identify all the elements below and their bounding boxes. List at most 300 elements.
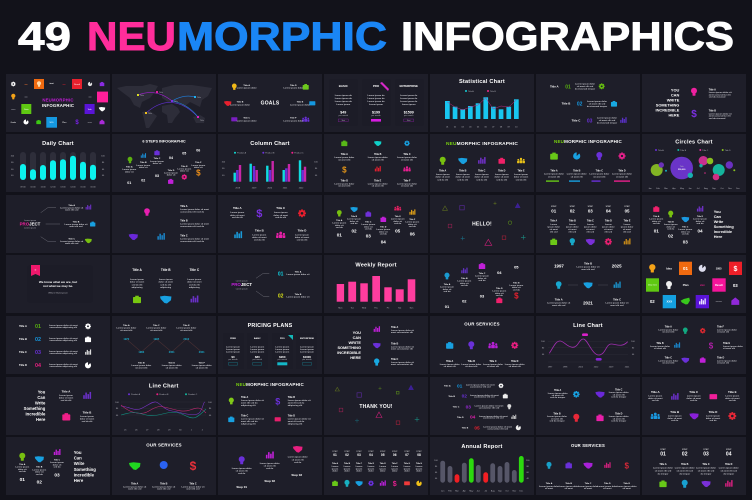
plan: pro: PRO <box>373 84 380 88</box>
step columns: Lorem <box>356 466 362 468</box>
step text: sed do <box>394 223 402 225</box>
column text: dolor sit amet <box>495 176 509 179</box>
axis labels: 80 <box>315 168 318 170</box>
plan: pro: Lorem ipsum do <box>367 95 385 97</box>
panel: you can write three icons: Lorem ipsum dolor sit <box>391 361 414 364</box>
axis labels <box>115 402 213 432</box>
plan: basic: Lorem ipsum do <box>335 101 352 103</box>
step columns <box>332 451 423 473</box>
plan: pro: per month <box>371 114 382 117</box>
panel: statistical chart <box>430 74 534 132</box>
panel: three titled rows <box>536 74 640 132</box>
panel: five title checker: sed do <box>709 420 717 422</box>
statement <box>714 209 734 239</box>
axis labels: 100 <box>526 460 530 462</box>
panel: our services three: Title B <box>160 482 168 486</box>
step columns: sit amet <box>623 228 631 231</box>
step columns: STEP <box>368 451 374 453</box>
plan: pro: PRO <box>280 338 285 340</box>
panel: neumorphic icon mosaic: xxx <box>24 97 29 99</box>
axis labels: 40 <box>632 354 635 356</box>
step text: sed do <box>667 229 675 231</box>
panel: four numbered rows: 01 <box>35 324 41 330</box>
row text: Lorem ipsum dolor sit amet <box>483 426 512 429</box>
statement <box>24 390 46 422</box>
month axis: Jul <box>697 188 700 190</box>
step columns: Lorem ipsum dolor <box>719 467 739 469</box>
bubble chart <box>651 156 735 180</box>
panel: four icons center: sit amet elit <box>551 417 563 420</box>
statement: Something <box>74 467 96 472</box>
step columns: STEP <box>703 449 709 451</box>
step columns: 07 <box>405 453 409 457</box>
step numbers <box>654 228 703 244</box>
panel: our services five: sit amet <box>584 487 592 490</box>
step text: dolor sit <box>167 174 176 177</box>
column text: Lorem ipsum dolor <box>567 174 587 176</box>
line series <box>549 339 628 355</box>
plan: enterprise: per month <box>404 114 414 117</box>
step labels: Step 02 <box>264 479 275 483</box>
row labels <box>444 385 469 430</box>
step text: sed do <box>409 226 416 228</box>
month axis: Oct <box>720 187 724 190</box>
step columns: Title A <box>659 463 667 466</box>
step text: Lorem ipsum <box>376 229 390 231</box>
panel: four icons center: Lorem ipsum dolor <box>547 416 567 418</box>
column text: dolor sit amet <box>456 176 470 179</box>
column text: Title A <box>439 170 447 173</box>
row text <box>466 384 512 430</box>
panel: our services four icons: sit amet elit <box>487 365 499 368</box>
day labels <box>338 306 414 309</box>
panel: five numbered staircase rows <box>430 377 534 435</box>
panel: timeline: Lorem ipsum dolor sit <box>606 302 629 304</box>
panel: our services four icons <box>430 316 534 374</box>
panel: six icons center: Lorem ipsum dolor <box>658 360 678 362</box>
panel: our services five: Lorem ipsum dolor <box>617 486 637 488</box>
plan: free: FREE <box>230 338 236 340</box>
axis labels: Feb <box>448 490 453 492</box>
pink bars <box>239 161 306 182</box>
step columns: elit sed <box>605 230 613 233</box>
quote card <box>27 265 93 303</box>
step text: Title D <box>496 287 503 290</box>
panel: three titled rows: 03 <box>587 118 593 124</box>
step text: Lorem ipsum <box>457 281 471 283</box>
panel: our services five: Title A <box>546 482 553 485</box>
panel: project two branches: Title A <box>295 270 302 273</box>
step text: Lorem ipsum <box>475 276 489 278</box>
step numbers: 01 <box>337 233 342 238</box>
panel: neumorphic four blocks: adipiscing elit <box>241 404 256 407</box>
column text: sit amet elit <box>548 176 560 179</box>
step columns: ipsum dolor <box>547 226 560 228</box>
panel: three steps rising: sed do <box>294 462 302 464</box>
panel: three steps with statement: sed do <box>36 474 43 476</box>
panel: four titles checker: sed do elit <box>254 239 265 242</box>
plan: free <box>226 338 240 365</box>
step text: dolor sit <box>180 170 189 173</box>
grid lines <box>121 402 206 415</box>
legend <box>465 90 496 93</box>
step text: dolor sit <box>666 225 675 228</box>
step text: Title B <box>351 215 358 218</box>
plan: enterprise: $1000 <box>303 355 311 359</box>
panel: five steps diagonal <box>430 255 534 313</box>
step columns: Lorem <box>391 466 398 468</box>
plan: basic: Lorem ipsum do <box>335 98 352 100</box>
panel: six icons center: Title B <box>656 342 664 345</box>
step text: dolor sit <box>393 220 402 223</box>
grid text: sit amet elit <box>372 185 384 188</box>
panel: project three branches: Title A <box>68 204 75 207</box>
step columns: 05 <box>381 453 385 457</box>
statement: You <box>38 390 46 394</box>
panel: three titled rows: Lorem ipsum dolor <box>575 84 595 86</box>
panel: you can write two titles: Lorem ipsum <box>80 416 94 418</box>
step columns: ipsum <box>368 468 374 470</box>
panel: four icons center: sit amet elit <box>613 417 625 420</box>
axes labels: 08 <box>500 127 503 129</box>
step text: sed do <box>443 291 451 293</box>
plan: basic: BASIC <box>254 337 261 340</box>
panel: three title columns: adipiscing <box>189 287 200 289</box>
step text: Title D <box>697 215 704 218</box>
step columns: do tempor <box>679 473 690 476</box>
panel: three titled rows: sit amet elit sed <box>599 119 616 122</box>
panel: four icons center: sed do tempor <box>611 420 626 423</box>
plan: pro: Lorem ipsum do <box>367 101 385 103</box>
panel: our services five: Title B <box>565 482 572 485</box>
axis labels: 13:00 <box>60 186 66 188</box>
row text: Lorem ipsum dolor sit amet <box>466 384 495 387</box>
statement: YOU <box>353 330 361 335</box>
panel: six staggered steps <box>324 195 428 253</box>
step text: Lorem ipsum <box>177 168 191 170</box>
step text: Title A <box>336 219 343 222</box>
panel: you can write two titles: dolor sit amet <box>59 396 73 400</box>
grid text: sit amet elit <box>401 185 413 188</box>
chart tracks <box>20 152 96 180</box>
row text: consectetur adipiscing elit <box>50 326 77 329</box>
panel: five title checker: dolor sit amet <box>687 397 701 400</box>
panel: goals <box>218 74 322 132</box>
legend: Product A <box>237 152 247 154</box>
panel: neumorphic four blocks: amet elit sed do <box>288 420 305 423</box>
step numbers <box>127 148 200 185</box>
step columns: Title B <box>681 463 689 466</box>
axis labels: 80 <box>435 466 438 468</box>
step columns: STEP <box>380 451 386 453</box>
heading: Column Chart <box>250 141 290 147</box>
panel: five title checker: dolor sit amet <box>725 397 740 400</box>
grid text: sit amet elit <box>401 158 413 161</box>
step text: dolor sit <box>335 224 344 227</box>
legend <box>655 149 731 152</box>
step columns: 01 <box>551 209 557 214</box>
legend: Title A <box>468 90 474 93</box>
panel: six icons center: sit amet elit <box>654 347 666 350</box>
panel: five steps diagonal: $ <box>514 292 519 300</box>
axis labels: 2022 <box>299 188 304 190</box>
panel: three steps rising: Lorem ipsum dolor <box>288 457 308 459</box>
step text: Lorem ipsum <box>405 222 419 224</box>
panel: neumorphic four blocks: adipiscing elit <box>241 422 256 425</box>
step text: sed do <box>380 234 387 236</box>
panel: neumorphic four blocks: Lorem ipsum dolor sit <box>241 418 264 420</box>
legend: Product C <box>188 393 198 396</box>
step columns: 03 <box>357 453 361 457</box>
panel: three steps with statement: dolor sit <box>18 468 27 471</box>
panel: five title checker: sed do <box>652 400 659 402</box>
month axis: Sep <box>712 188 717 190</box>
step columns: 03 <box>588 209 593 214</box>
month axis: May <box>680 188 685 190</box>
step columns: 02 <box>570 209 575 214</box>
step text: dolor sit <box>696 220 705 223</box>
panel: project three branches: Lorem ipsum dolor sit <box>60 240 83 243</box>
plan: basic: Lorem ipsum <box>250 346 264 348</box>
row text: Lorem ipsum dolor sit amet <box>475 405 504 408</box>
heading: Annual Report <box>461 444 503 450</box>
panel: neumorphic icon mosaic: xxxx <box>11 109 16 111</box>
grid text: sit amet elit <box>372 158 384 161</box>
callout pills <box>582 333 602 361</box>
step text: dolor sit <box>681 230 690 233</box>
legend: Title B <box>490 90 496 93</box>
panel: three title columns: Lorem ipsum <box>159 279 173 281</box>
day labels: Sun <box>410 307 414 309</box>
axis labels: 1997 <box>548 366 553 368</box>
panel: three steps with statement: Lorem ipsum <box>50 462 64 464</box>
statement: Incredible <box>26 412 46 416</box>
panel: our services four icons: Title D <box>511 360 519 363</box>
step labels: Step 03 <box>291 473 302 477</box>
plan: free: Lorem ipsum <box>226 349 240 351</box>
axis labels: 100 <box>115 402 120 404</box>
panel: project two branches: 01 <box>278 271 284 277</box>
step numbers <box>445 265 519 309</box>
step columns: 04 <box>726 451 732 457</box>
plan: enterprise: ENTERPRISE <box>399 84 418 88</box>
panel: project two branches: 02 <box>278 294 284 300</box>
step text: Title C <box>682 226 689 229</box>
step text: Title A <box>444 283 451 286</box>
step columns: ipsum dolor <box>584 226 597 228</box>
step columns: sit amet elit sed <box>698 469 715 472</box>
axis labels: 80 <box>542 347 545 349</box>
statement: Write <box>74 461 85 466</box>
step text: Lorem ipsum <box>361 224 375 226</box>
axis labels: May <box>469 490 474 492</box>
step columns: Title D <box>368 462 375 465</box>
panel: four titles checker: Title D <box>298 229 306 233</box>
panel: zigzag timeline: Title A <box>123 324 130 327</box>
panel: zigzag timeline: sit amet elit <box>120 329 133 332</box>
panel: our services five: Lorem ipsum dolor <box>578 486 598 488</box>
panel: you can write two titles: Title B <box>83 410 91 414</box>
column text: Lorem ipsum <box>514 174 528 176</box>
step columns: sit amet <box>568 228 577 231</box>
plan: enterprise: Lorem ipsum do <box>400 98 418 100</box>
legend: Product B <box>265 152 275 154</box>
panel: five title checker: sed do <box>671 420 679 422</box>
column text: Lorem ipsum <box>436 174 450 176</box>
plan: basic: $49 <box>340 111 346 115</box>
statement: HERE <box>350 355 361 360</box>
panel: five title checker: Title A <box>651 390 661 394</box>
plan: pro: Lorem ipsum <box>275 346 289 348</box>
step text: sed do <box>336 227 343 229</box>
panel: line chart three products <box>112 377 216 435</box>
step labels: Step 01 <box>236 485 247 489</box>
statement: Here <box>714 234 723 239</box>
step text: Lorem ipsum <box>164 172 178 174</box>
panel: neumorphic icon mosaic: Goals <box>11 122 16 124</box>
step columns: STEP <box>392 451 398 453</box>
step text: Title D <box>380 226 387 228</box>
panel: neumorphic icon mosaic: 50% <box>50 122 54 124</box>
grid text: sit amet elit <box>338 185 351 188</box>
axis labels: 40 <box>209 415 212 417</box>
step columns: Title B <box>569 219 576 222</box>
panel: neumorphic four blocks <box>218 377 322 435</box>
axes labels: 06 <box>485 127 488 129</box>
panel: three icons with list: Title A <box>180 205 188 208</box>
heading: NEUMORPHIC INFOGRAPHIC <box>446 141 518 147</box>
plan: pro <box>367 84 385 122</box>
step columns: dolor <box>332 471 338 473</box>
step columns: sit amet elit sed <box>676 469 694 472</box>
column text: Lorem ipsum dolor <box>589 174 609 176</box>
goal labels: Lorem ipsum dolor <box>237 88 257 90</box>
heading: GOALS <box>261 100 280 106</box>
axis labels: Dec <box>519 490 523 492</box>
panel: line chart pink purple <box>536 316 640 374</box>
panel: timeline: amet elit sed <box>610 304 624 307</box>
panel: three icons with list: consectetur elit sed do <box>180 240 205 243</box>
panel: project three branches: Lorem ipsum dolor sit <box>60 207 83 210</box>
ribbon <box>288 335 293 340</box>
column text: sed do elit <box>496 178 507 181</box>
heading: Line Chart <box>149 384 179 390</box>
step columns: STEP <box>726 449 732 451</box>
plan: enterprise: Start <box>407 119 411 122</box>
step text <box>122 157 205 177</box>
plan: enterprise: Lorem ipsum <box>300 349 314 351</box>
panel: you can write: amet consectetur elit <box>709 115 731 118</box>
plan: pro: Lorem ipsum <box>275 352 289 354</box>
axis labels: 30 <box>179 430 182 432</box>
panel: neumorphic four blocks: amet elit sed do <box>241 420 258 423</box>
panel: you can write two titles: sed do elit <box>82 420 93 423</box>
step text: dolor sit <box>194 166 203 169</box>
step numbers: 04 <box>497 270 502 275</box>
panel: you can write: Lorem ipsum dolor sit <box>709 113 732 116</box>
panel: timeline: amet elit sed <box>552 304 566 307</box>
plan: basic: Lorem ipsum do <box>335 95 352 97</box>
step columns: Lorem <box>404 466 410 468</box>
panel: three titled rows: sit amet elit sed <box>589 102 606 106</box>
axis labels: Aug <box>491 490 495 492</box>
legend <box>234 152 304 154</box>
zigzag line <box>126 339 202 352</box>
step text: Lorem ipsum <box>678 229 692 231</box>
heading: Circles Chart <box>675 140 713 146</box>
grid text: Title C <box>403 153 411 156</box>
panel: four titles checker: dolor sit amet <box>252 236 267 239</box>
project label: Lorem ipsum <box>236 280 248 283</box>
panel: six icons center: Lorem ipsum dolor <box>717 329 737 331</box>
panel: three title columns: dolor sit amet <box>159 281 173 284</box>
panel: three titled rows: Title B <box>562 102 570 106</box>
row labels: Title B <box>448 395 455 398</box>
axis labels: 2021 <box>625 366 630 368</box>
panel: three titled rows: Lorem ipsum dolor <box>587 101 607 103</box>
grid text: Title F <box>404 179 411 182</box>
panel: three steps rising: sed do <box>238 473 246 475</box>
axis labels: 2 <box>202 430 204 432</box>
title <box>18 15 734 59</box>
panel: three title columns: Title B <box>161 268 171 272</box>
route markers: Title <box>159 91 164 94</box>
day labels: Sat <box>398 306 402 309</box>
step numbers: 04 <box>697 228 703 233</box>
panel: you can write three icons: Title A <box>391 326 398 329</box>
panel: you can write two titles: dolor sit amet <box>80 417 94 420</box>
panel: three titled rows: sit amet elit sed <box>577 85 594 88</box>
step columns: ipsum <box>344 468 350 470</box>
step text: sed do <box>350 223 358 225</box>
step columns <box>653 449 739 476</box>
step columns: Title E <box>380 462 386 465</box>
statement: INCREDIBLE <box>656 108 680 113</box>
day labels: Fri <box>387 306 390 309</box>
panel: you can write three icons: amet consectetur elit <box>391 348 413 351</box>
panel: four numbered rows: Title B <box>19 337 27 341</box>
years: 2021 <box>583 301 593 306</box>
step numbers: 04 <box>169 156 173 160</box>
title: MORPHIC <box>177 15 387 59</box>
progress bars <box>546 180 630 182</box>
statement: You <box>74 450 82 455</box>
panel: neumorphic four blocks: Lorem ipsum dolor sit <box>288 399 311 402</box>
panel: neumorphic icon mosaic: Task <box>87 109 93 111</box>
column text: Lorem ipsum <box>456 174 470 176</box>
route markers: Title <box>197 96 202 99</box>
plan: pro: Lorem ipsum <box>369 104 383 106</box>
panel: five title checker: Lorem ipsum <box>687 395 701 397</box>
panel: three steps with statement: sed do <box>53 466 61 468</box>
axis labels: 29 <box>168 430 171 432</box>
panel: zigzag timeline: Lorem ipsum dolor <box>146 328 166 330</box>
statement: WRITE <box>348 340 361 345</box>
step text: sed do <box>682 234 689 236</box>
panel: icon mosaic large: $ <box>734 266 738 273</box>
bubble chart: $50,000 <box>678 169 686 171</box>
panel: four titles checker: dolor sit amet <box>274 214 288 217</box>
step columns: sit amet <box>586 228 595 231</box>
panel: zigzag timeline: Lorem ipsum dolor <box>162 365 182 367</box>
axis labels: 100 <box>101 156 106 158</box>
axis labels: 2018 <box>235 188 241 190</box>
step columns: elit sed <box>587 230 595 233</box>
plan: pro: per month <box>278 358 288 361</box>
step columns: STEP <box>682 449 688 451</box>
panel: three title columns: sed do elit <box>189 283 200 286</box>
heading: HELLO! <box>472 222 492 228</box>
